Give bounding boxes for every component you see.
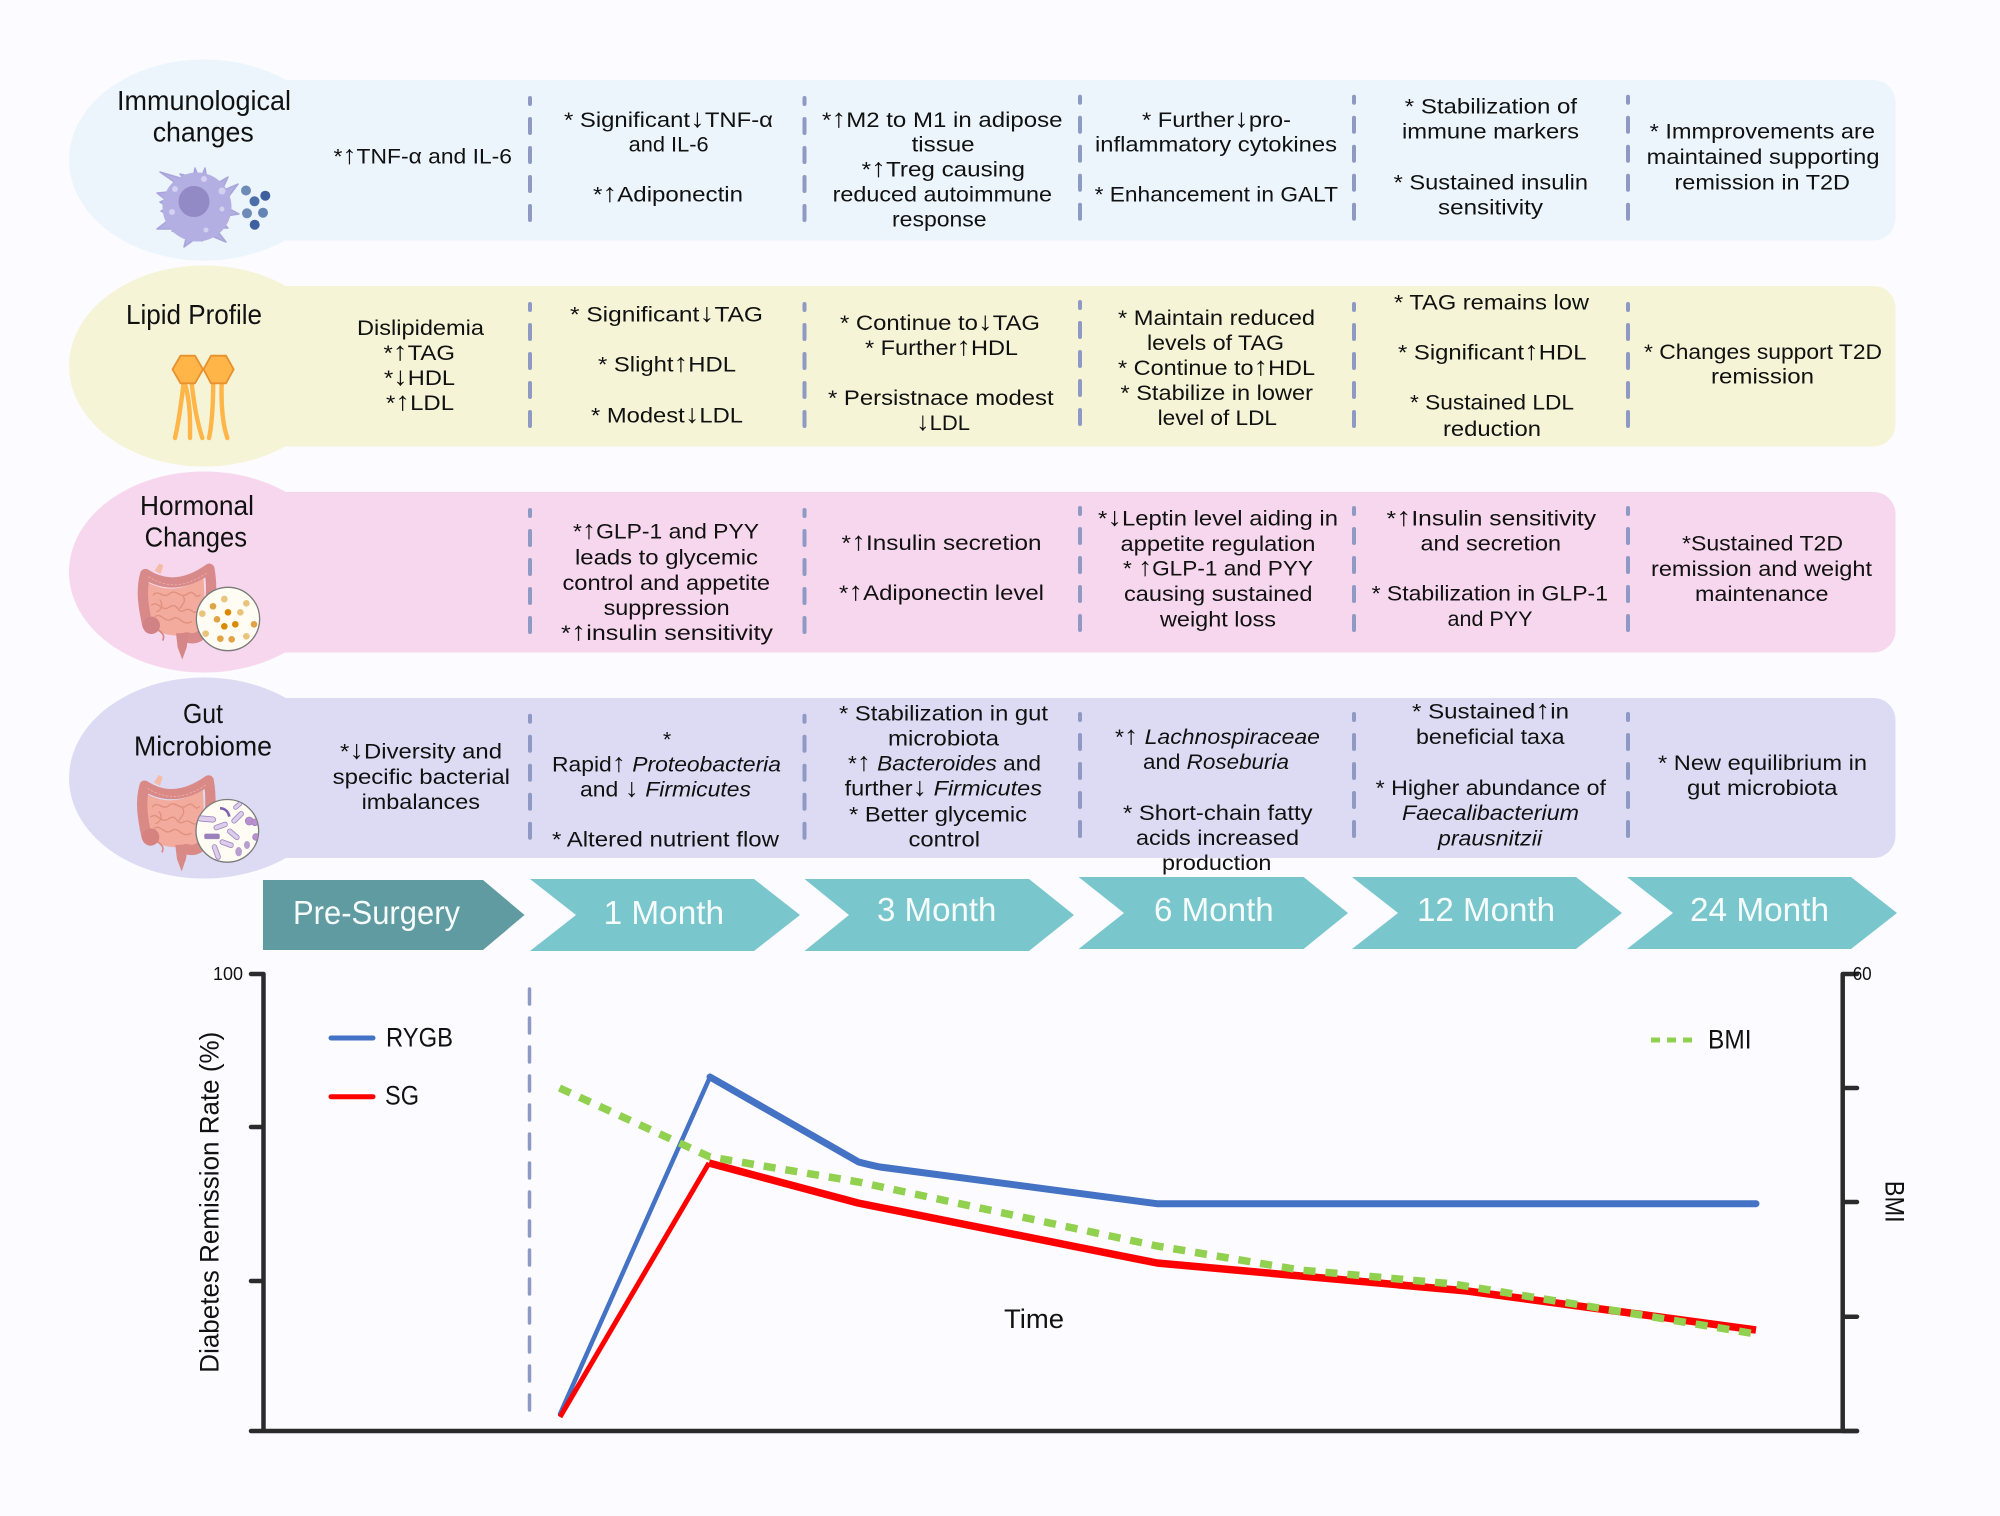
text: 6 month lipid: levels of TAG [1147,332,1284,355]
text: 6 month microbiome: *↑ Lachnospiraceae [1115,720,1320,750]
text: 12 month hormonal: and PYY [1448,608,1532,631]
text: pre-surgery immunological: *↑TNF-α and IL-6 [334,139,512,169]
timeline arrow: Pre-Surgery: Pre-Surgery [293,894,460,931]
icon: intestine with gut bacteria [142,775,259,871]
timeline arrow: 1 Month: 1 Month [604,894,724,931]
text: 6 month immunological [1095,103,1338,207]
text: 24 month hormonal: maintenance [1695,583,1828,606]
series: RYGB [560,1077,1756,1414]
legend: BMI [1651,1024,1752,1054]
text: 1 month immunological [564,103,773,208]
text: 24 month microbiome: * New equilibrium in [1658,752,1867,775]
text: 1 month hormonal: control and appetite [562,572,770,595]
text: 12 month hormonal: *↑Insulin sensitivity [1386,502,1597,532]
text: 6 month lipid [1118,307,1315,430]
timeline arrow: 12 Month [1352,877,1622,949]
text: pre-surgery microbiome: specific bacterial [333,766,510,789]
axis value: 60: 60 [1853,964,1872,984]
text: 12 month hormonal [1372,502,1608,631]
text: 6 month immunological: * Further ↓pro- [1142,103,1291,133]
text: 12 month immunological [1394,96,1588,219]
text: pre-surgery microbiome [333,734,510,814]
text: 6 month hormonal: *↓Leptin level aiding in [1098,502,1338,532]
text: 12 month lipid: * Significant ↑HDL [1398,336,1586,366]
heading: Hormonal Changes: Changes [145,522,247,553]
text: 1 month hormonal: leads to glycemic [575,546,758,570]
text: 3 month hormonal: *↑Adiponectin level [839,576,1044,606]
text: 1 month microbiome: and ↓ Firmicutes [580,773,752,803]
text: 1 month lipid: * Significant ↓TAG [570,298,763,328]
text: 1 month hormonal: suppression [604,597,730,620]
text: 1 month immunological: *↑Adiponectin [593,178,743,208]
surgery marker dashed line [528,989,531,1412]
text: pre-surgery lipid: *↑LDL [386,386,454,416]
series: SG [560,1163,1756,1417]
text: 24 month lipid [1644,341,1882,388]
axis value: 100: 100 [213,964,243,984]
text: 12 month lipid [1394,292,1590,441]
text: pre-surgery lipid [357,317,484,416]
text: 12 month hormonal: * Stabilization in GLP-1 [1372,583,1608,606]
panel background: lavender [69,678,1896,878]
text: 1 month hormonal [561,514,774,646]
text: 24 month hormonal: remission and weight [1651,558,1872,581]
text: 1 month hormonal: *↑GLP-1 and PYY [573,514,759,544]
timeline arrow: 6 Month: 6 Month [1154,891,1274,928]
text: 1 month immunological: * Significant ↓TNF-α [564,103,773,133]
text: 12 month microbiome: prausnitzii [1437,828,1543,850]
text: 3 month lipid: * Continue to ↓TAG [840,306,1040,336]
text: 6 month hormonal: weight loss [1159,609,1276,632]
text: 24 month immunological [1647,121,1880,194]
text: 1 month lipid [570,298,763,429]
text: 6 month lipid: * Continue to ↑HDL [1118,351,1315,381]
text: 3 month microbiome: control [908,829,980,852]
right axis with ticks [1843,974,1857,1431]
panel background: yellow [69,266,1896,466]
heading: Gut Microbiome: Microbiome [134,731,272,762]
series: BMI [560,1088,1756,1334]
text: 3 month hormonal [839,526,1044,606]
text: 12 month immunological: sensitivity [1438,196,1544,219]
panel: Immunological changes [69,60,1896,260]
text: 3 month immunological: response [892,209,987,232]
text: 1 month immunological: and IL-6 [629,134,709,157]
timeline arrow: 24 Month [1627,877,1897,949]
legend: SG: SG [385,1080,419,1110]
panel: Hormonal Changes [69,472,1896,672]
text: 6 month microbiome [1115,720,1320,875]
text: 6 month hormonal: * ↑GLP-1 and PYY [1123,552,1313,582]
text: 1 month lipid: * Slight ↑HDL [598,348,736,378]
text: 1 month microbiome: Rapid↑ Proteobacteria [552,748,781,778]
text: 6 month lipid: * Stabilize in lower [1120,382,1313,405]
text: 3 month immunological: *↑Treg causing [862,153,1025,183]
heading: Hormonal Changes: Hormonal [140,490,254,521]
timeline arrow: 3 Month: 3 Month [877,891,996,928]
text: pre-surgery microbiome: imbalances [362,791,480,814]
panel: Gut Microbiome [69,678,1896,878]
text: 12 month immunological: * Stabilization of [1405,96,1577,118]
legend: SG [331,1080,419,1110]
text: 12 month microbiome: * Higher abundance of [1376,777,1606,800]
text: 1 month lipid: * Modest ↓LDL [591,399,743,429]
heading: Hormonal Changes [140,490,254,553]
heading: Immunological changes [117,85,291,148]
text: pre-surgery microbiome: *↓Diversity and [340,734,502,764]
text: 3 month immunological: tissue [912,134,975,157]
timeline arrow: 12 Month: 12 Month [1417,891,1555,928]
legend: BMI: BMI [1708,1024,1752,1054]
text: 24 month immunological: maintained supporting [1647,146,1880,169]
legend: RYGB [331,1023,453,1053]
text: pre-surgery lipid: *↓HDL [384,361,455,391]
timeline arrow: Pre-Surgery [263,880,524,950]
text: 24 month microbiome [1658,752,1867,800]
heading: Immunological changes: changes [153,117,254,148]
line chart: remission rate and BMI [194,964,1910,1431]
text: 6 month microbiome: * Short-chain fatty [1123,802,1313,825]
text: 3 month lipid: * Persistnace modest [828,387,1054,410]
legend: RYGB: RYGB [386,1023,453,1053]
timeline arrow: 6 Month [1079,877,1348,949]
panel background: pink [69,472,1896,672]
text: 24 month immunological: remission in T2D [1674,171,1850,194]
text: 3 month microbiome: microbiota [888,728,999,751]
text: 3 month microbiome: *↑ Bacteroides and [848,747,1041,777]
text: 3 month immunological [822,103,1062,232]
panel background: blue [69,60,1896,260]
text: 6 month lipid: level of LDL [1158,407,1277,430]
text: pre-surgery lipid: Dislipidemia [357,317,484,340]
text: 24 month lipid: * Changes support T2D [1644,341,1882,364]
text: 3 month hormonal: *↑Insulin secretion [842,526,1042,556]
text: 24 month microbiome: gut microbiota [1687,777,1838,800]
text: 3 month immunological: *↑M2 to M1 in adipose [822,103,1062,133]
icon: immune cell with cytokines [157,168,270,247]
text: 12 month microbiome: * Sustained ↑in [1412,694,1569,724]
text: 12 month lipid: reduction [1443,418,1541,441]
text: 12 month lipid: * Sustained LDL [1410,392,1574,414]
heading: Gut Microbiome: Gut [183,698,223,729]
text: 6 month hormonal [1098,502,1338,632]
axis title: Diabetes Remission Rate (%): Diabetes Remission Rate (%) [194,1032,224,1373]
text: 3 month microbiome: * Stabilization in gut [839,703,1048,726]
text: 24 month lipid: remission [1711,366,1814,388]
axis title: Time: Time [1004,1304,1064,1334]
text: 6 month lipid: * Maintain reduced [1118,307,1315,330]
text: 24 month immunological: * Immprovements are [1650,121,1875,144]
text: 3 month immunological: reduced autoimmune [833,184,1052,207]
text: 1 month microbiome: * Altered nutrient flow [552,829,780,852]
timeline arrow: 1 Month [530,879,800,951]
text: 3 month lipid: * Further ↑HDL [865,331,1018,361]
text: 3 month lipid: ↓LDL [916,406,970,436]
text: 6 month microbiome: and Roseburia [1143,751,1289,774]
text: 1 month microbiome: * [663,729,671,752]
text: 12 month microbiome: beneficial taxa [1416,726,1565,749]
icon: phospholipids [172,356,234,438]
text: 24 month hormonal [1651,532,1872,606]
text: 12 month lipid: * TAG remains low [1394,292,1590,314]
text: 3 month lipid [828,306,1054,436]
text: 3 month microbiome: further ↓ Firmicutes [845,772,1043,802]
panel: Lipid Profile [69,266,1896,466]
left axis with ticks [251,974,1857,1431]
text: 6 month immunological: inflammatory cytokines [1095,134,1337,157]
text: 12 month microbiome [1376,694,1606,850]
icon: intestine with hormone granules [143,563,260,660]
heading: Immunological changes: Immunological [117,85,291,116]
text: 12 month immunological: * Sustained insulin [1394,171,1588,194]
text: 6 month microbiome: production [1162,852,1271,875]
timeline arrow: 24 Month: 24 Month [1690,891,1829,928]
text: 24 month hormonal: *Sustained T2D [1682,532,1843,556]
text: 3 month microbiome [839,703,1048,852]
text: 6 month immunological: * Enhancement in GALT [1095,184,1338,207]
heading: Gut Microbiome [134,698,272,762]
text: 3 month microbiome: * Better glycemic [849,804,1027,827]
text: 1 month microbiome [552,729,781,852]
text: 12 month hormonal: and secretion [1420,532,1561,556]
axis title: BMI: BMI [1880,1181,1910,1223]
text: 1 month hormonal: *↑insulin sensitivity [561,616,774,646]
text: 6 month microbiome: acids increased [1136,827,1299,850]
text: 12 month microbiome: Faecalibacterium [1402,802,1579,825]
text: 6 month hormonal: causing sustained [1124,583,1312,606]
text: 6 month hormonal: appetite regulation [1120,533,1316,556]
timeline arrow: 3 Month [804,879,1074,951]
heading: Lipid Profile: Lipid Profile [126,299,262,330]
text: pre-surgery lipid: *↑TAG [384,336,455,366]
text: 12 month immunological: immune markers [1402,121,1579,144]
